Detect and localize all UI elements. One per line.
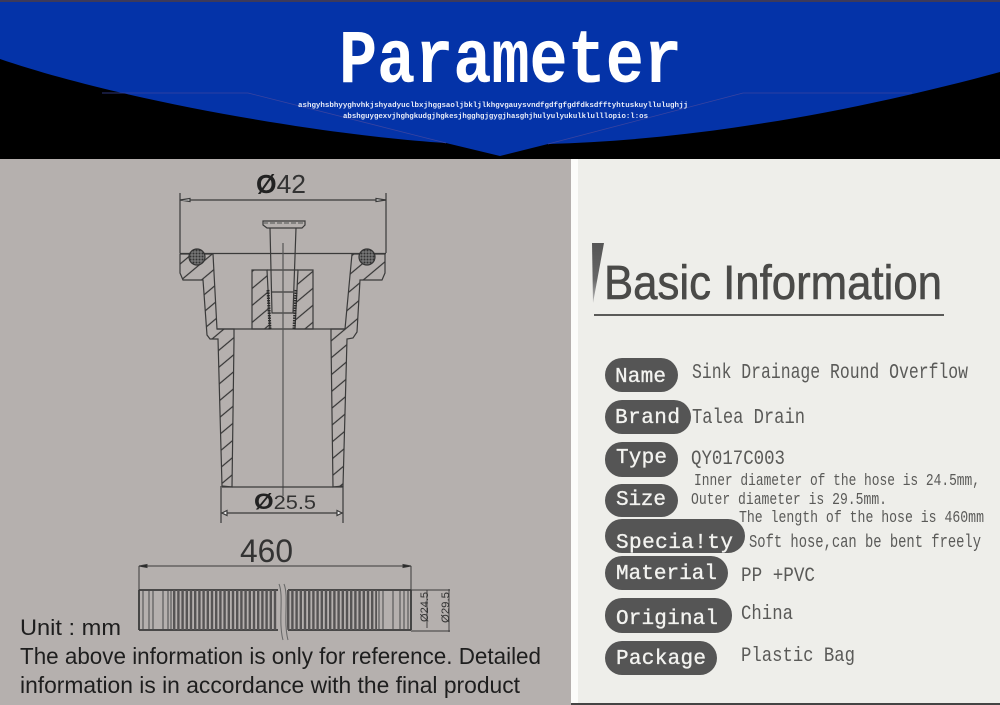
label: Speciality	[605, 519, 745, 555]
note text: The above information is only for reference. Detailed	[20, 643, 541, 669]
thread marks	[268, 290, 296, 329]
label: Brand: Brand	[615, 407, 680, 430]
tube bottom	[222, 486, 343, 488]
side dimensions: Ø29.5	[440, 592, 452, 623]
value: Original: China	[741, 603, 793, 626]
heading: Basic Information	[592, 243, 944, 316]
drawing: hose	[139, 533, 452, 640]
dimension: bottom diameter: Ø25.5	[254, 489, 316, 514]
value: Size	[691, 472, 984, 528]
label: Size	[605, 484, 678, 517]
hose outline	[139, 590, 411, 630]
banner small text: abshguygexvjhghgkudgjhgkesjhgghgjgygjhasghjhulyulyukulklulllopio:l:os	[343, 113, 648, 121]
left wall	[180, 254, 234, 487]
label: Speciality: Specia!ty	[616, 532, 733, 555]
stopper pin	[263, 221, 305, 228]
right wall	[331, 254, 385, 487]
label: Material	[605, 556, 728, 590]
side dimensions	[411, 589, 452, 632]
value: Size: Outer diameter is 29.5mm.	[691, 491, 887, 510]
banner decorative lines	[102, 93, 912, 144]
panel: info background	[571, 159, 1000, 705]
heading: Basic Information: Basic Information	[604, 257, 942, 310]
hose ribs	[173, 590, 377, 630]
dimension: hose length	[139, 533, 411, 590]
title: Parameter	[339, 19, 682, 105]
note text	[20, 615, 541, 698]
label: Original	[605, 598, 732, 633]
label: Original: Original	[616, 608, 718, 631]
central block right	[295, 270, 313, 329]
panel: drawing background	[0, 159, 571, 705]
inner floor line	[217, 328, 345, 330]
O-ring left	[189, 249, 205, 265]
banner small text: ashgyhsbhyyghvhkjshyadyuclbxjhggsaoljbkljlkhgvgauysvndfgdfgfgdfdksdfftyhtuskuyllulughjj	[298, 102, 688, 110]
note text: Unit : mm	[20, 615, 121, 640]
label: Type: Type	[616, 447, 667, 470]
dimension: top diameter	[180, 169, 386, 253]
center line	[282, 243, 284, 496]
banner small text	[298, 102, 688, 121]
value: Material: PP +PVC	[741, 565, 815, 588]
label: Material: Material	[616, 563, 717, 586]
label: Package	[605, 641, 717, 675]
dimension: top diameter: Ø42	[256, 169, 306, 199]
note text: information is in accordance with the final product	[20, 672, 521, 698]
label: Name	[605, 358, 678, 392]
side dimensions: Ø24.5	[419, 592, 431, 622]
header band	[0, 0, 1000, 159]
label: Name: Name	[615, 366, 666, 389]
label: Package: Package	[616, 648, 706, 671]
hose break	[279, 584, 288, 640]
central block left	[252, 270, 270, 329]
value: Type: QY017C003	[691, 448, 785, 471]
dimension: hose length: 460	[240, 533, 293, 569]
value: Package: Plastic Bag	[741, 645, 855, 668]
flange top line	[180, 252, 386, 254]
label: Type	[605, 442, 678, 477]
hose ends	[143, 591, 408, 629]
label: Brand	[605, 400, 691, 434]
drawing: drain cross-section	[180, 169, 386, 523]
central block top	[267, 269, 298, 271]
blue banner shape	[0, 2, 1000, 156]
value: Brand: Talea Drain	[692, 407, 805, 430]
O-ring right	[359, 249, 375, 265]
dimension: bottom diameter	[221, 486, 343, 523]
label: Size: Size	[616, 489, 666, 512]
